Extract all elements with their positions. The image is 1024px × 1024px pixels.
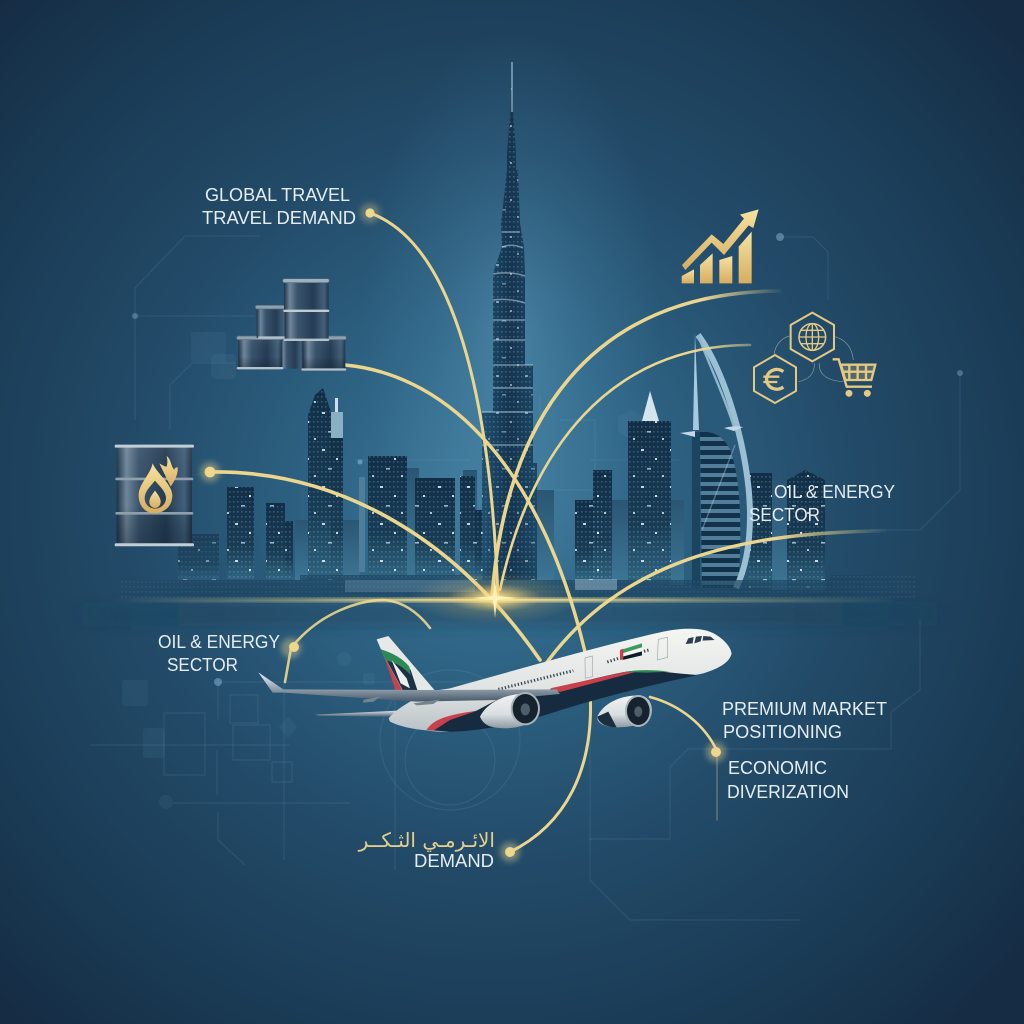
label: oil and energy sector left [158, 632, 280, 675]
fuselage [389, 629, 732, 732]
curve: global travel demand [370, 213, 498, 600]
wing [258, 672, 560, 702]
icon: euro hexagon [754, 355, 796, 403]
curve: premium market [650, 697, 717, 751]
label: oil and energy sector left: SECTOR [167, 655, 238, 675]
skyline: towers [178, 388, 825, 590]
horizon glow [110, 572, 900, 624]
curve: demand [510, 690, 591, 852]
icon: flame [139, 456, 178, 513]
trade icons: globe, euro, cart [754, 313, 875, 403]
engine near [480, 693, 540, 728]
label: economic diverization: ECONOMIC [728, 758, 827, 778]
curve: energy barrel [210, 472, 540, 660]
connecting arcs [774, 336, 853, 382]
navy belly [427, 671, 697, 732]
cockpit windows [686, 636, 715, 644]
label: global travel demand: TRAVEL DEMAND [202, 208, 356, 228]
label: premium market positioning [722, 699, 887, 742]
curve: trade hexagons [500, 345, 750, 590]
drum: bottom right [301, 336, 346, 371]
drum: upper lower [283, 310, 329, 341]
label: oil and energy sector right: SECTOR [749, 505, 820, 525]
red cheatline [427, 672, 637, 730]
label: arabic demand: الائـرمـي الثـكــر [358, 828, 495, 853]
oil drum stack [237, 279, 346, 371]
UAE flag [623, 643, 642, 653]
tailplane [315, 710, 413, 717]
icon: growth chart with arrow [682, 209, 759, 283]
waterfront ground strip [60, 575, 960, 626]
tail fin [377, 636, 435, 694]
Burj Khalifa tower [482, 60, 537, 580]
label: oil and energy sector right: OIL & ENERGY [774, 482, 895, 502]
label: global travel demand [202, 185, 356, 228]
glow behind tower [362, 30, 662, 630]
doors [585, 637, 668, 678]
curve: oil and energy left [285, 600, 430, 682]
label: economic diverization: DIVERIZATION [727, 782, 849, 802]
drum: bottom centre [280, 341, 303, 369]
skyline: distant buildings [295, 468, 790, 590]
background hexagon and square decorations [122, 233, 963, 809]
curve: oil and energy right [540, 531, 885, 672]
gold connector curves [210, 213, 885, 852]
oil barrel with flame [115, 445, 194, 546]
airliner [258, 629, 732, 732]
connector end dots [200, 203, 726, 862]
label: oil and energy sector left: OIL & ENERGY [158, 632, 280, 652]
label: global travel demand: GLOBAL TRAVEL [205, 185, 350, 205]
curve: growth chart [492, 291, 780, 598]
curve: oil barrels [345, 365, 588, 665]
background circuit lines [90, 236, 960, 920]
label: premium market positioning: PREMIUM MARKET [722, 699, 887, 719]
Burj Al Arab sail hotel [680, 333, 750, 588]
drum: bottom left [237, 336, 283, 369]
label: oil and energy sector right [749, 482, 895, 525]
icon: globe hexagon [791, 313, 834, 361]
green cheatline [625, 670, 670, 673]
drum: top [283, 279, 329, 312]
label: economic diverization [727, 758, 849, 802]
icon: shopping cart [833, 359, 875, 396]
drum: middle left [255, 305, 288, 339]
cabin windows [498, 671, 573, 689]
label: arabic demand: DEMAND [414, 851, 494, 871]
engine far [597, 695, 652, 727]
label: premium market positioning: POSITIONING [723, 722, 842, 742]
label: arabic demand [358, 828, 495, 871]
curve: stem below premium dot [716, 755, 718, 820]
